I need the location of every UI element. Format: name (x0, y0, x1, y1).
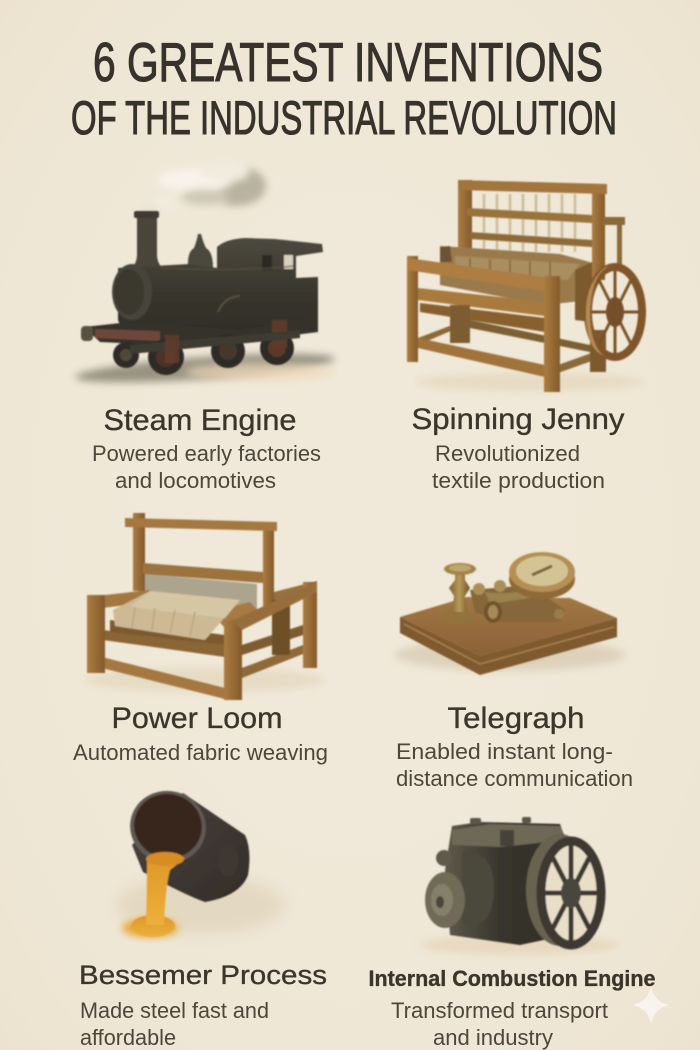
description: internal combustion engine: and industry (433, 1025, 553, 1050)
description: telegraph: distance communication (396, 766, 633, 791)
description: telegraph (396, 739, 633, 791)
icon: sparkle watermark (632, 986, 670, 1024)
icon: power loom frame (85, 513, 325, 700)
description: internal combustion engine: Transformed transport (391, 998, 608, 1023)
description: spinning jenny: Revolutionized (435, 441, 580, 466)
icon: crucible pouring molten steel (115, 782, 285, 937)
description: bessemer process: Made steel fast and (80, 998, 269, 1023)
description: steam engine: and locomotives (115, 468, 276, 493)
description: spinning jenny: textile production (432, 468, 605, 493)
description: power loom: Automated fabric weaving (73, 740, 328, 765)
icon: steam locomotive (75, 162, 335, 388)
description: spinning jenny (432, 441, 605, 493)
title (71, 31, 617, 144)
heading: power loom: Power Loom (112, 702, 282, 735)
panel: steam engine (75, 162, 335, 493)
description: steam engine (92, 441, 321, 493)
panel: spinning jenny (407, 180, 645, 493)
description: bessemer process (80, 998, 269, 1050)
heading: steam engine: Steam Engine (104, 404, 296, 437)
heading: internal combustion engine: Internal Combustion Engine (368, 966, 656, 991)
description: bessemer process: affordable (80, 1025, 176, 1050)
heading: bessemer process: Bessemer Process (79, 960, 327, 990)
panel: internal combustion engine (368, 817, 656, 1050)
heading: spinning jenny: Spinning Jenny (412, 403, 624, 436)
panel: power loom (73, 513, 328, 765)
panel: bessemer process (79, 782, 327, 1050)
description: internal combustion engine (391, 998, 608, 1050)
icon: engine with flywheel (420, 817, 620, 955)
description: steam engine: Powered early factories (92, 441, 321, 466)
heading: telegraph: Telegraph (448, 702, 584, 735)
icon: spinning jenny frame (407, 180, 645, 392)
icon: telegraph key and dial (395, 552, 625, 675)
description: telegraph: Enabled instant long- (396, 739, 613, 764)
panel: telegraph (395, 552, 633, 791)
